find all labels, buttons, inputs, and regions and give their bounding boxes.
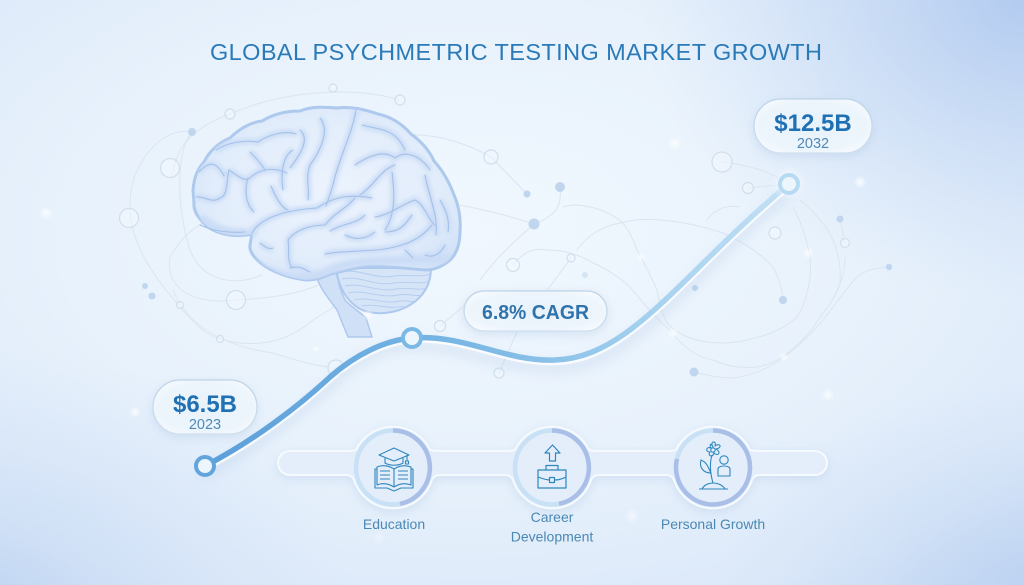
hollow nodes [120,84,850,378]
track [278,427,827,508]
item: personal growth [661,430,765,532]
label: Career Development: Development [511,528,593,544]
callout: $12.5B 2032: 2032 [797,136,829,152]
cerebrum [193,107,460,280]
icon: graduation cap and book [375,448,413,491]
application bar [278,427,827,544]
node: 2023 [196,457,214,475]
icon: plant and person [699,442,730,489]
callout: $12.5B 2032: $12.5B [774,110,852,137]
filled nodes [142,128,892,376]
callout: 6.8% CAGR: 6.8% CAGR [482,302,590,324]
item: career development [511,430,593,544]
right network curves [440,157,889,378]
node: 2032 [771,166,807,202]
callout: $6.5B 2023: 2023 [189,417,221,433]
brain illustration [193,107,460,337]
label: Education: Education [363,516,425,532]
node: midpoint [403,329,421,347]
callout: $6.5B 2023 [153,380,257,434]
sulci [196,110,449,272]
label: Career Development: Career [531,509,574,525]
title: GLOBAL PSYCHMETRIC TESTING MARKET GROWTH [210,39,822,65]
left network curves [130,92,534,367]
label: Personal Growth: Personal Growth [661,516,765,532]
growth line [205,184,789,474]
network lines and nodes [120,84,892,378]
callout: $12.5B 2032 [754,99,872,153]
callout: 6.8% CAGR [464,291,607,331]
cerebellum [336,268,431,313]
soft inner shading [196,110,450,277]
brain stem [316,268,372,337]
callout: $6.5B 2023: $6.5B [173,391,237,418]
icon: arrow and briefcase [538,445,566,488]
sparkles [39,136,867,544]
item: education [356,430,430,532]
